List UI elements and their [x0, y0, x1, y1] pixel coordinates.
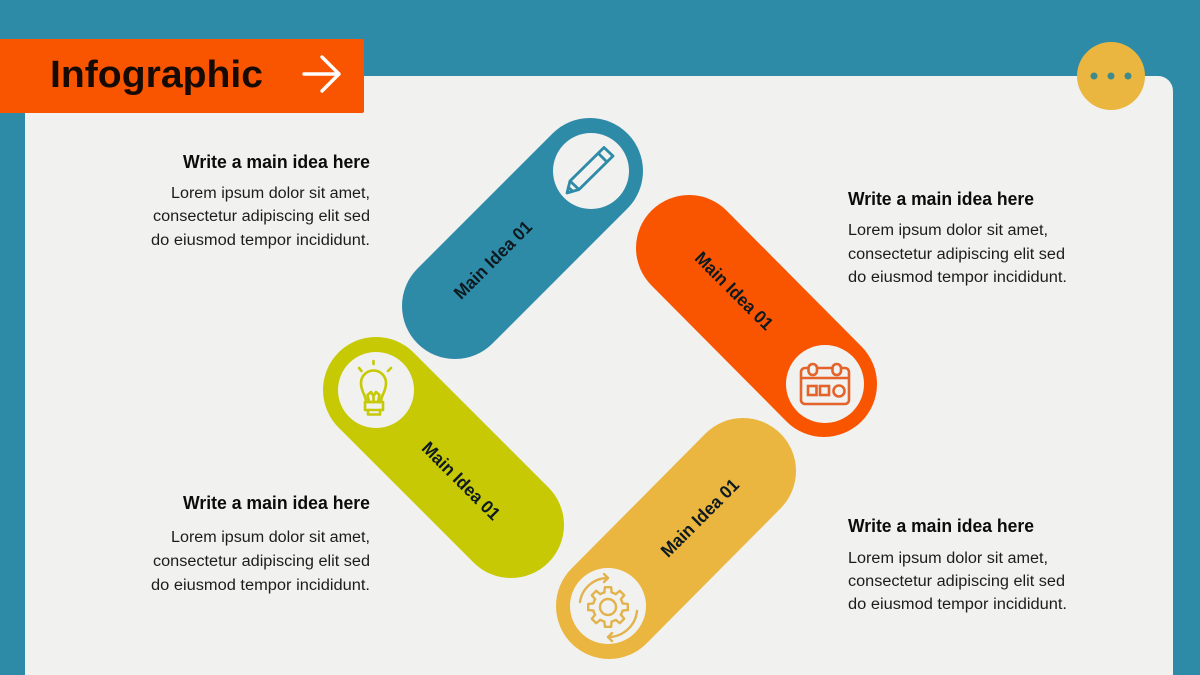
- pill label: Main Idea 01: [691, 248, 777, 334]
- text block: bottom right: Write a main idea here: [848, 516, 1034, 536]
- text block: top left: consectetur adipiscing elit sed: [153, 208, 370, 225]
- text block: top left: [151, 152, 370, 249]
- text block: bottom right: [848, 516, 1067, 613]
- text block: bottom left: consectetur adipiscing elit sed: [153, 553, 370, 570]
- text block: top right: Lorem ipsum dolor sit amet,: [848, 222, 1048, 239]
- icon: pencil: [567, 148, 613, 193]
- pill label: Main Idea 01: [418, 438, 504, 524]
- icon: light bulb: [359, 361, 391, 414]
- pill: orange idea: [689, 248, 864, 423]
- text block: bottom left: [151, 493, 370, 594]
- text block: top left: Lorem ipsum dolor sit amet,: [171, 185, 370, 202]
- pill: lime idea: [338, 352, 511, 525]
- text block: top left: do eiusmod tempor incididunt.: [151, 232, 370, 249]
- text block: bottom right: Lorem ipsum dolor sit amet,: [848, 550, 1048, 567]
- icon: gear with arrows: [580, 574, 637, 641]
- text block: bottom left: Write a main idea here: [183, 493, 370, 513]
- text block: bottom left: do eiusmod tempor incididunt.: [151, 577, 370, 594]
- icon: arrow: [304, 57, 339, 91]
- pill: blue idea: [450, 133, 629, 306]
- pill: yellow idea: [570, 471, 743, 644]
- text block: top right: do eiusmod tempor incididunt.: [848, 269, 1067, 286]
- text block: top right: [848, 189, 1067, 286]
- text block: top left: Write a main idea here: [183, 152, 370, 172]
- icon: calendar: [801, 364, 849, 404]
- text block: top right: consectetur adipiscing elit sed: [848, 246, 1065, 263]
- menu button: [1077, 42, 1145, 110]
- pill label: Main Idea 01: [450, 217, 536, 303]
- text block: bottom left: Lorem ipsum dolor sit amet,: [171, 529, 370, 546]
- text block: top right: Write a main idea here: [848, 189, 1034, 209]
- text block: bottom right: consectetur adipiscing elit sed: [848, 573, 1065, 590]
- title: Infographic: [50, 54, 263, 96]
- pill label: Main Idea 01: [657, 475, 743, 561]
- title banner: [0, 39, 364, 113]
- text block: bottom right: do eiusmod tempor incididunt.: [848, 596, 1067, 613]
